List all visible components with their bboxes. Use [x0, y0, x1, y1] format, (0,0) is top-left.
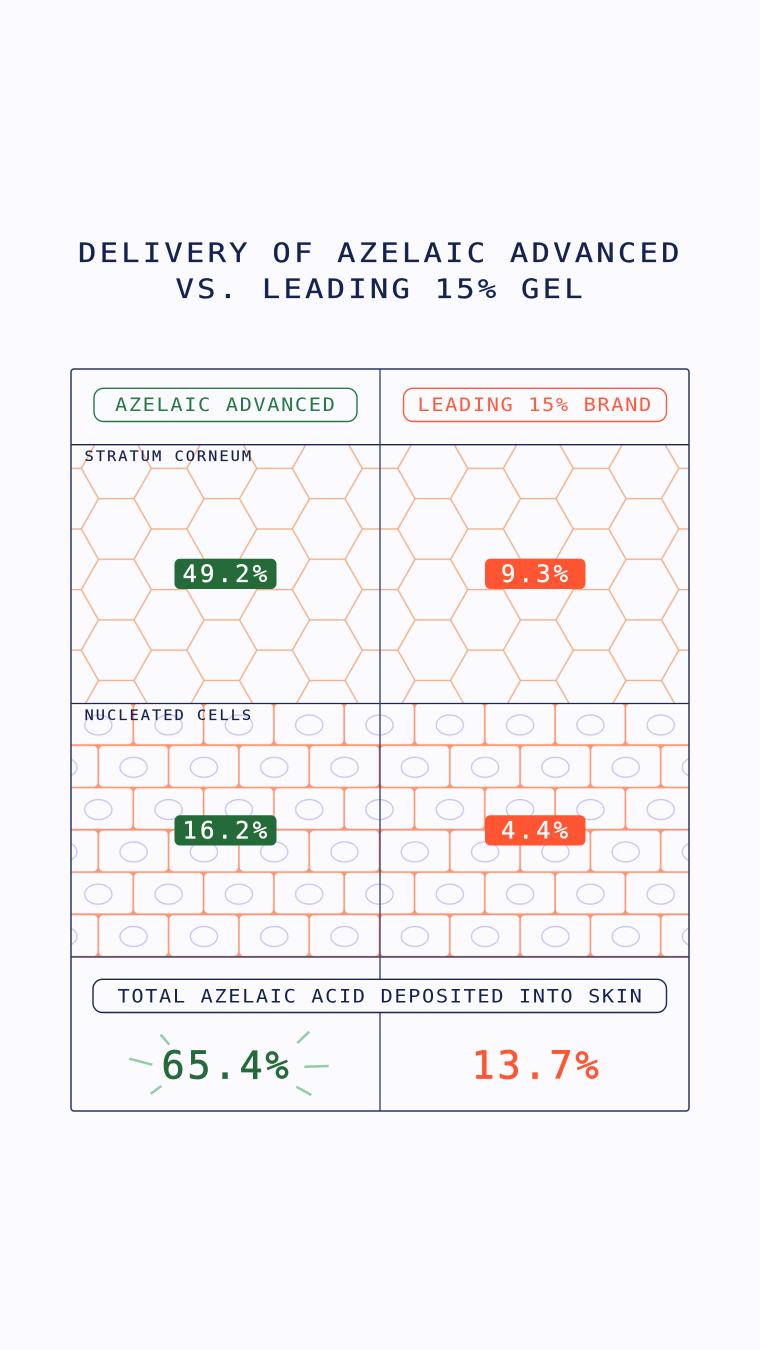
badge: 9.3%: 9.3%: [501, 560, 571, 588]
badge: 4.4%: 4.4%: [501, 816, 571, 844]
badge: 16.2%: 16.2%: [182, 816, 270, 844]
column header: azelaic advanced: [94, 388, 357, 422]
column header: leading 15% brand: [404, 388, 666, 422]
total value: 65.4%: 65.4%: [162, 1044, 292, 1088]
total value: 13.7%: 13.7%: [472, 1044, 602, 1088]
title: [78, 237, 683, 304]
column header: leading 15% brand: LEADING 15% BRAND: [418, 394, 653, 416]
layer label: stratum corneum: STRATUM CORNEUM: [84, 449, 253, 465]
badge: 9.3%: [485, 559, 586, 589]
total heading pill: TOTAL AZELAIC ACID DEPOSITED INTO SKIN: [118, 985, 643, 1007]
badge: 49.2%: 49.2%: [182, 560, 270, 588]
panel: stratum corneum hexagon pattern: [71, 445, 689, 704]
total heading pill: [93, 979, 666, 1012]
title: VS. LEADING 15% GEL: [176, 273, 586, 304]
title: DELIVERY OF AZELAIC ADVANCED: [78, 237, 683, 268]
column header: azelaic advanced: AZELAIC ADVANCED: [115, 394, 336, 416]
icon: celebration rays: [129, 1032, 329, 1095]
comparison table grid: [71, 369, 689, 1111]
panel: nucleated cells pattern: [71, 704, 689, 957]
layer label: nucleated cells: NUCLEATED CELLS: [84, 708, 253, 724]
badge: 4.4%: [485, 815, 586, 846]
